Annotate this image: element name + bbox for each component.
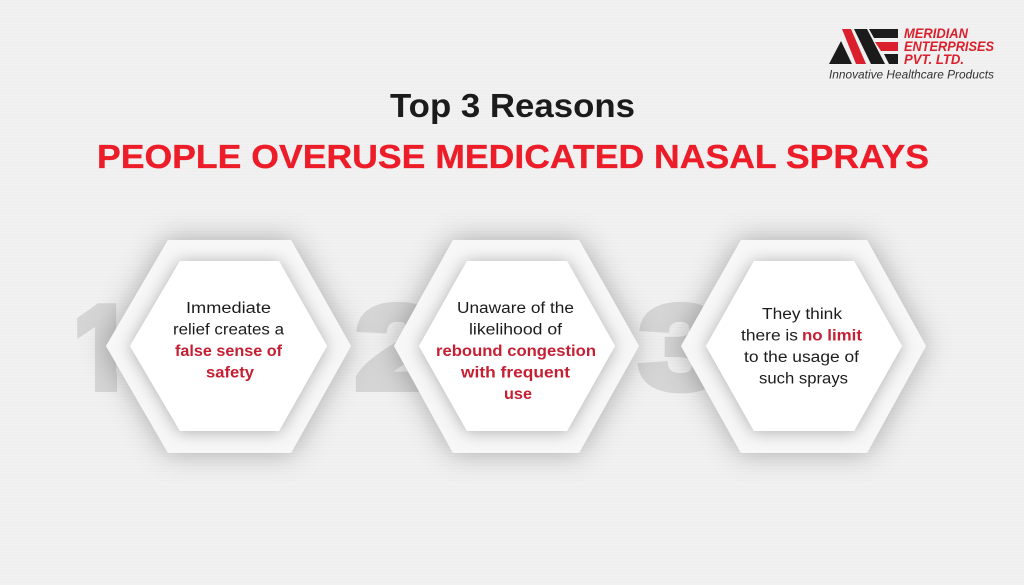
panel: reason 3 hexagon: there is — [741, 328, 798, 344]
panel: reason 2 hexagon: Unaware of the — [457, 300, 574, 317]
panel: reason 2 hexagon: likelihood of — [469, 322, 563, 338]
logo: Meridian Enterprises: PVT. LTD. — [904, 51, 964, 67]
panel: reason 3 hexagon: no limit — [802, 328, 862, 344]
logo: Meridian Enterprises: Innovative Healthcare Products — [829, 68, 994, 82]
panel: reason 1 hexagon: safety — [206, 364, 254, 382]
heading: red subtitle: PEOPLE OVERUSE MEDICATED NASAL SPRAYS — [97, 138, 929, 175]
logo: Meridian Enterprises — [829, 25, 995, 82]
panel: reason 1 hexagon: relief creates a — [173, 322, 284, 338]
panel: reason 2 hexagon — [394, 240, 639, 453]
panel: reason 3 hexagon: They think — [762, 306, 842, 323]
panel: reason 3 hexagon: to the usage of — [744, 349, 860, 366]
panel: reason 2 hexagon: rebound congestion — [436, 343, 596, 360]
panel: reason 1 hexagon: false sense of — [175, 343, 283, 360]
number 2: 2 — [355, 282, 441, 414]
logo: Meridian Enterprises: ENTERPRISES — [904, 38, 995, 54]
panel: reason 3 hexagon: such sprays — [759, 370, 848, 388]
number 1: 1 — [73, 282, 133, 414]
infographic canvas — [77, 28, 994, 469]
logo: Meridian Enterprises: MERIDIAN — [904, 25, 969, 41]
title: Top 3 Reasons — [390, 87, 635, 124]
panel: reason 1 hexagon: Immediate — [186, 300, 271, 317]
panel: reason 1 hexagon — [106, 240, 351, 453]
panel: reason 2 hexagon: use — [504, 386, 532, 403]
panel: reason 2 hexagon: with frequent — [460, 364, 570, 382]
number 3: 3 — [639, 282, 723, 414]
panel: reason 3 hexagon — [681, 240, 926, 453]
